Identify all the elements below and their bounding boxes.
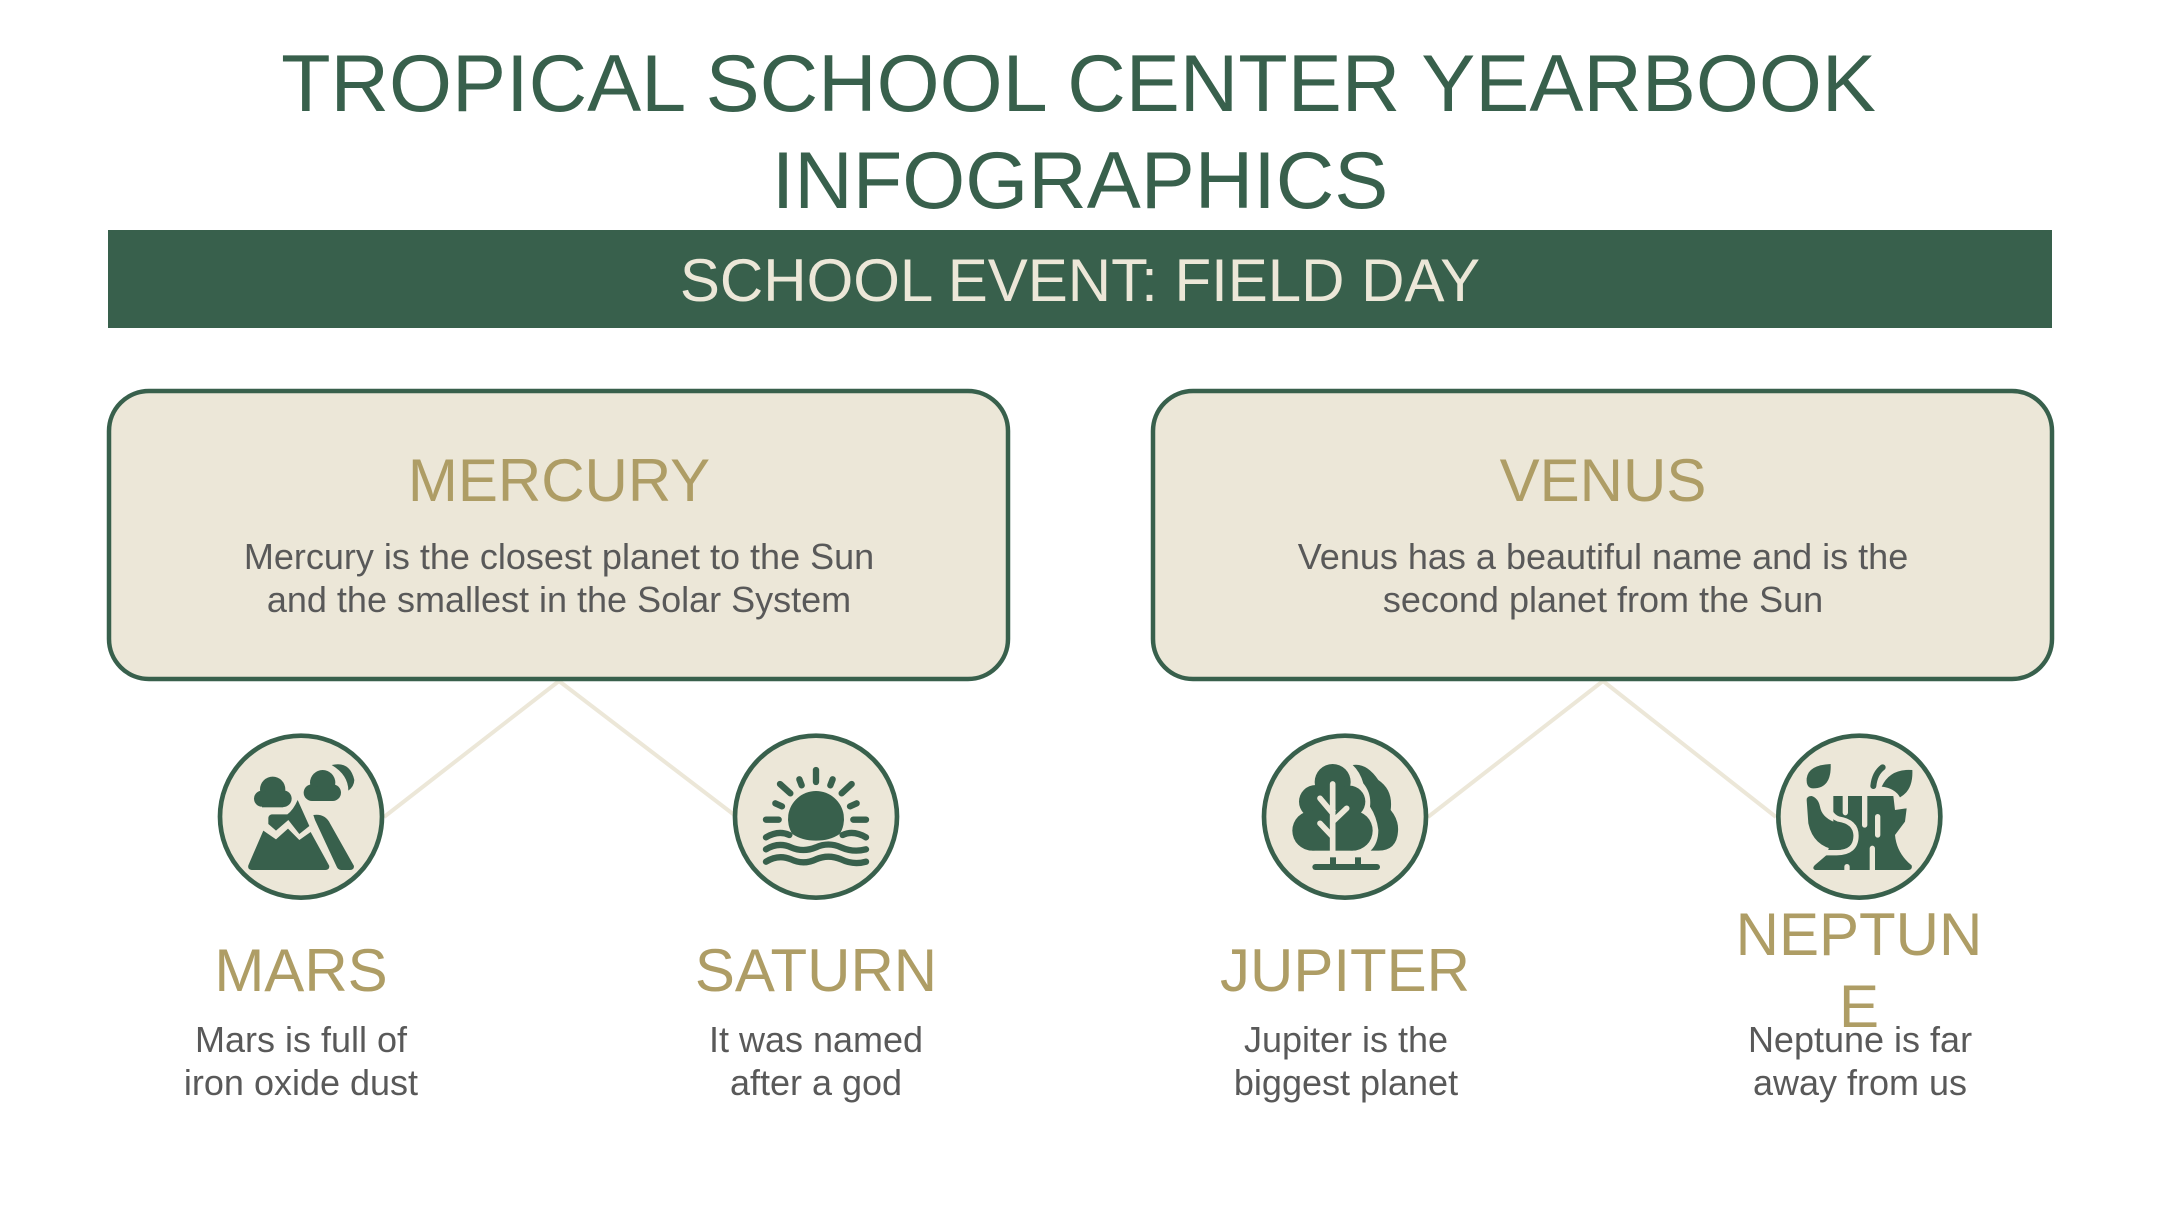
item: Neptune [1736,901,1982,1103]
panel: Mercury: Mercury is the closest planet to the Sun [244,536,874,577]
item: Saturn: SATURN [695,937,937,1004]
panel: Mercury: MERCURY [408,447,710,514]
icon: tree stump with leaves [1778,736,1940,898]
title: INFOGRAPHICS [772,136,1388,226]
item: Jupiter: biggest planet [1234,1062,1458,1103]
item: Saturn [695,937,937,1103]
connector: Venus to Jupiter and Neptune [1428,681,1776,817]
icon: mountain [220,736,382,898]
item: Neptune: Neptune is far [1748,1019,1972,1060]
item: Jupiter: JUPITER [1220,937,1470,1004]
item: Jupiter [1220,937,1470,1103]
banner: school event: SCHOOL EVENT: FIELD DAY [680,247,1480,314]
item: Mars [184,937,418,1103]
title: TROPICAL SCHOOL CENTER YEARBOOK [281,39,1876,129]
item: Saturn: after a god [730,1062,902,1103]
panel: Venus: Venus has a beautiful name and is the [1298,536,1908,577]
panel: Venus: VENUS [1500,447,1706,514]
panel: Venus [1153,391,2052,679]
item: Neptune: NEPTUN [1736,901,1982,968]
banner: school event [108,230,2052,328]
item: Neptune: away from us [1753,1062,1967,1103]
item: Mars: Mars is full of [195,1019,408,1060]
item: Mars: iron oxide dust [184,1062,418,1103]
icon: sunset over water [735,736,897,898]
item: Mars: MARS [214,937,388,1004]
panel: Mercury [109,391,1008,679]
item: Saturn: It was named [709,1019,923,1060]
title [281,39,1876,226]
panel: Mercury: and the smallest in the Solar System [267,579,851,620]
icon: trees [1264,736,1426,898]
panel: Venus: second planet from the Sun [1383,579,1823,620]
item: Neptune: E [1839,973,1879,1040]
item: Jupiter: Jupiter is the [1244,1019,1448,1060]
connector: Mercury to Mars and Saturn [384,681,737,817]
